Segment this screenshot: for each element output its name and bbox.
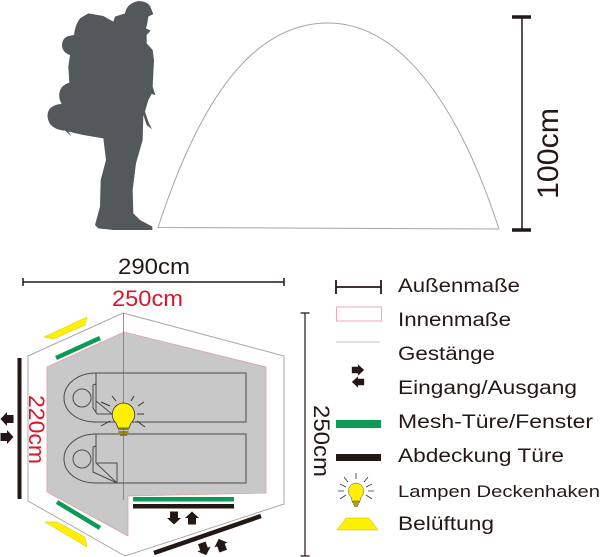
legend label: Gestänge: Gestänge bbox=[398, 344, 495, 365]
vent bottom left bbox=[45, 522, 87, 547]
arrow: diagonal door in bbox=[195, 540, 213, 557]
floor plan bbox=[0, 313, 284, 557]
arrow: bottom door in bbox=[167, 512, 181, 524]
legend icon: poles bbox=[336, 341, 380, 343]
legend icon: ventilation bbox=[337, 518, 378, 530]
arrow: left door out bbox=[0, 412, 14, 426]
dimension: height 100cm: 100cm bbox=[532, 108, 565, 199]
pole line bbox=[122, 313, 124, 500]
door cover bottom bbox=[133, 504, 234, 508]
legend label: Innenmaße: Innenmaße bbox=[398, 310, 511, 331]
dimension: outer width 290cm bbox=[23, 254, 284, 286]
mesh window bottom left bbox=[57, 502, 100, 528]
legend label: Mesh-Türe/Fenster: Mesh-Türe/Fenster bbox=[398, 412, 594, 433]
inner tent bbox=[47, 332, 266, 536]
legend icon: entrance arrows bbox=[352, 364, 364, 388]
legend label: Belüftung: Belüftung bbox=[398, 514, 494, 535]
vent top left bbox=[44, 317, 87, 339]
sleeping bag 1 bbox=[64, 373, 246, 422]
legend icon: mesh door bbox=[336, 420, 381, 428]
legend label: Außenmaße: Außenmaße bbox=[398, 276, 520, 297]
sleeping bag 2 bbox=[64, 434, 246, 483]
legend label: Abdeckung Türe: Abdeckung Türe bbox=[398, 446, 564, 467]
door cover left bbox=[18, 358, 22, 499]
arrow: bottom door out bbox=[185, 512, 199, 524]
silhouette: hiker with backpack bbox=[47, 1, 155, 230]
arrow: left door in bbox=[0, 430, 14, 444]
legend icon: inner dimensions bbox=[336, 307, 382, 321]
legend icon: door cover bbox=[336, 454, 381, 461]
dimension: height 100cm bbox=[512, 17, 565, 230]
inner width label 250cm: 250cm bbox=[112, 286, 183, 311]
tent side profile bbox=[158, 23, 499, 229]
icon: lamp on ceiling hook bbox=[101, 396, 145, 435]
legend label: Lampen Deckenhaken: Lampen Deckenhaken bbox=[398, 482, 600, 501]
dimension: outer width 290cm: 290cm bbox=[118, 254, 190, 279]
dimension: outer depth 250cm bbox=[300, 313, 334, 556]
inner depth label 220cm: 220cm bbox=[24, 395, 49, 464]
door cover diagonal bbox=[154, 516, 261, 553]
mesh window top left bbox=[56, 338, 100, 358]
legend label: Eingang/Ausgang: Eingang/Ausgang bbox=[398, 378, 577, 399]
outer footprint bbox=[28, 313, 284, 556]
legend bbox=[336, 276, 600, 535]
legend icon: outer dimensions bbox=[336, 280, 381, 294]
legend icon: lamp bbox=[338, 473, 374, 506]
arrow: diagonal door out bbox=[212, 536, 230, 554]
mesh door bottom bbox=[133, 497, 234, 502]
dimension: outer depth 250cm: 250cm bbox=[309, 405, 334, 477]
